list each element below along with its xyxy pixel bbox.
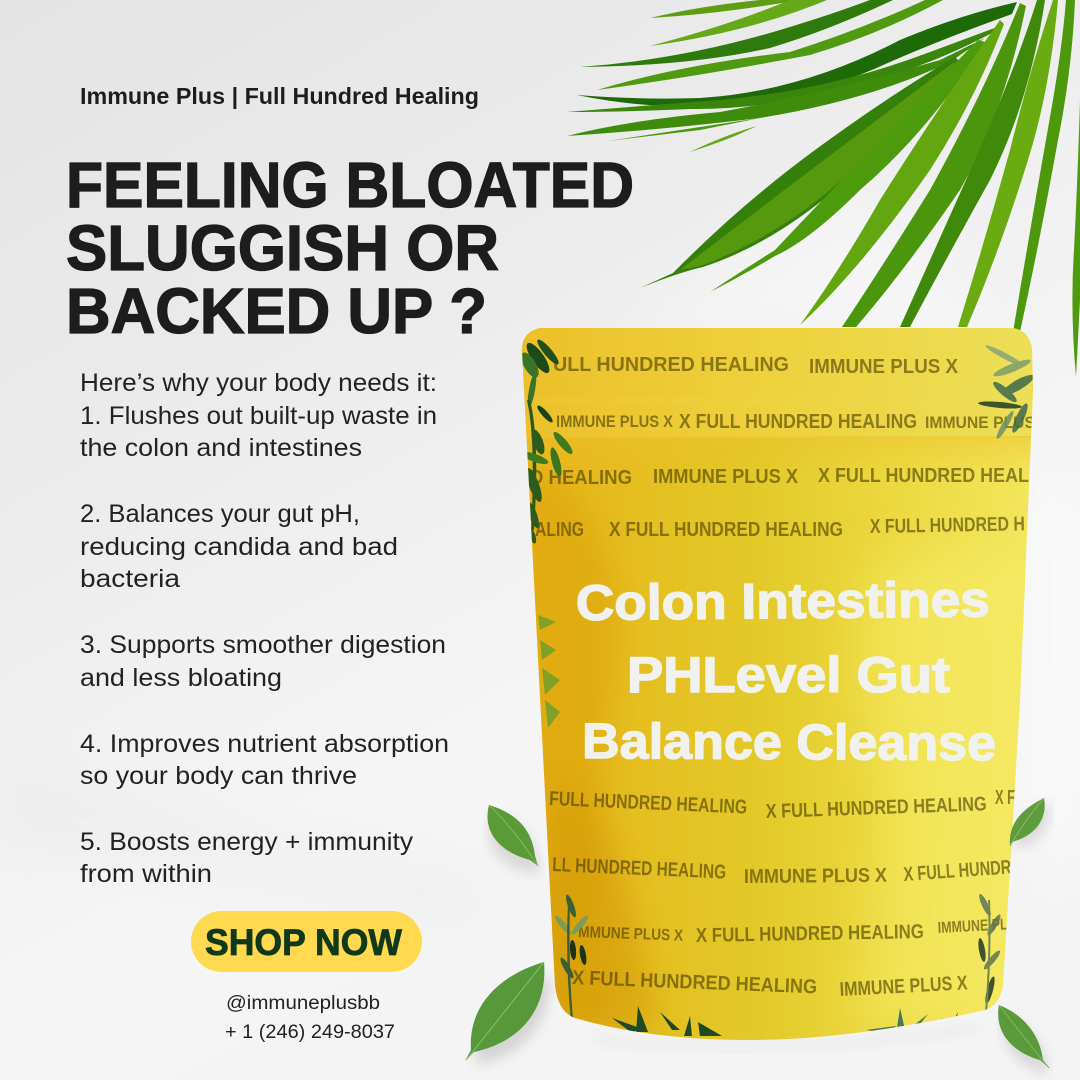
leaf: bottom left: [465, 962, 550, 1065]
botanical: bottom grass tufts: [612, 1006, 958, 1036]
pouch pattern text: X FULL HUNDRED HEALING: [609, 519, 843, 541]
pouch pattern text: X F: [995, 787, 1015, 809]
pouch pattern text: ALING: [535, 519, 584, 541]
pouch pattern text: IMMUNE PL: [937, 916, 1008, 937]
pouch pattern text: X FULL HUNDRED HEALING: [765, 793, 987, 823]
brand line: Immune Plus | Full Hundred Healing: [80, 83, 479, 109]
pouch pattern text: X FULL HUNDRED H: [870, 513, 1025, 538]
pouch pattern text: D HEALING: [530, 467, 632, 489]
botanical: bottom left sprig: [555, 894, 588, 1018]
benefits list: 2. Balances your gut pH,: [80, 500, 360, 528]
shop now button: SHOP NOW: [205, 922, 402, 963]
contact details: [225, 993, 395, 1043]
pouch pattern text: X FULL HUNDRED HEALI: [818, 465, 1034, 487]
benefits list: from within: [80, 860, 212, 888]
palm frond: [567, 0, 1080, 377]
benefits list: 4. Improves nutrient absorption: [80, 730, 449, 758]
benefits list: and less bloating: [80, 664, 282, 692]
pouch pattern text: X FULL HUNDRED HEALING: [696, 921, 924, 947]
pouch pattern text: X FULL HUNDRED HEALING: [572, 967, 817, 998]
pouch pattern text: X FULL HUNDR: [903, 856, 1012, 886]
botanical: left fern: [538, 615, 560, 728]
benefits list: bacteria: [80, 565, 180, 593]
botanical: top left sprig: [522, 340, 572, 544]
pouch title: PHLevel Gut: [627, 647, 950, 703]
pouch pattern text: IMMUNE PLUS X: [556, 412, 674, 431]
benefits list: the colon and intestines: [80, 434, 362, 462]
pouch pattern text: FULL HUNDRED HEALING: [549, 788, 748, 819]
pouch pattern text: X FULL HUNDRED HEALING: [679, 411, 917, 433]
benefits list: [80, 369, 449, 888]
headline: [66, 149, 634, 347]
pouch pattern text: [530, 354, 1035, 1001]
contact details: @immuneplusbb: [226, 993, 380, 1014]
pouch pattern text: LL HUNDRED HEALING: [552, 854, 727, 884]
pouch title: Colon Intestines: [576, 571, 990, 631]
leaf: left middle: [487, 805, 540, 874]
benefits list: 1. Flushes out built-up waste in: [80, 402, 437, 430]
benefits list: 3. Supports smoother digestion: [80, 631, 446, 659]
leaf: right middle: [1010, 798, 1050, 848]
pouch pattern text: IMMUNE PLUS X: [744, 865, 888, 888]
headline: BACKED UP ?: [66, 275, 487, 347]
benefits list: Here’s why your body needs it:: [80, 369, 437, 397]
shop now button: [191, 911, 422, 972]
product pouch: [518, 325, 1040, 1051]
leaf: bottom right: [998, 1005, 1049, 1074]
pouch pattern text: IMMUNE PLUS X: [653, 466, 799, 488]
headline: FEELING BLOATED: [66, 149, 634, 221]
pouch pattern text: ULL HUNDRED HEALING: [553, 354, 789, 376]
pouch title: [576, 571, 996, 771]
contact details: + 1 (246) 249-8037: [225, 1022, 395, 1043]
pouch title: Balance Cleanse: [582, 713, 996, 771]
pouch pattern text: MMUNE PLUS X: [578, 924, 684, 945]
benefits list: 5. Boosts energy + immunity: [80, 828, 414, 856]
botanical: top right sprig: [978, 343, 1036, 440]
benefits list: reducing candida and bad: [80, 533, 398, 561]
botanical: bottom right sprig: [978, 894, 1000, 1010]
pouch pattern text: IMMUNE PLUS X: [839, 972, 969, 1001]
benefits list: so your body can thrive: [80, 762, 357, 790]
headline: SLUGGISH OR: [66, 212, 499, 284]
pouch pattern text: IMMUNE PLUS X: [809, 356, 959, 378]
pouch pattern text: IMMUNE PLUS: [925, 413, 1035, 432]
